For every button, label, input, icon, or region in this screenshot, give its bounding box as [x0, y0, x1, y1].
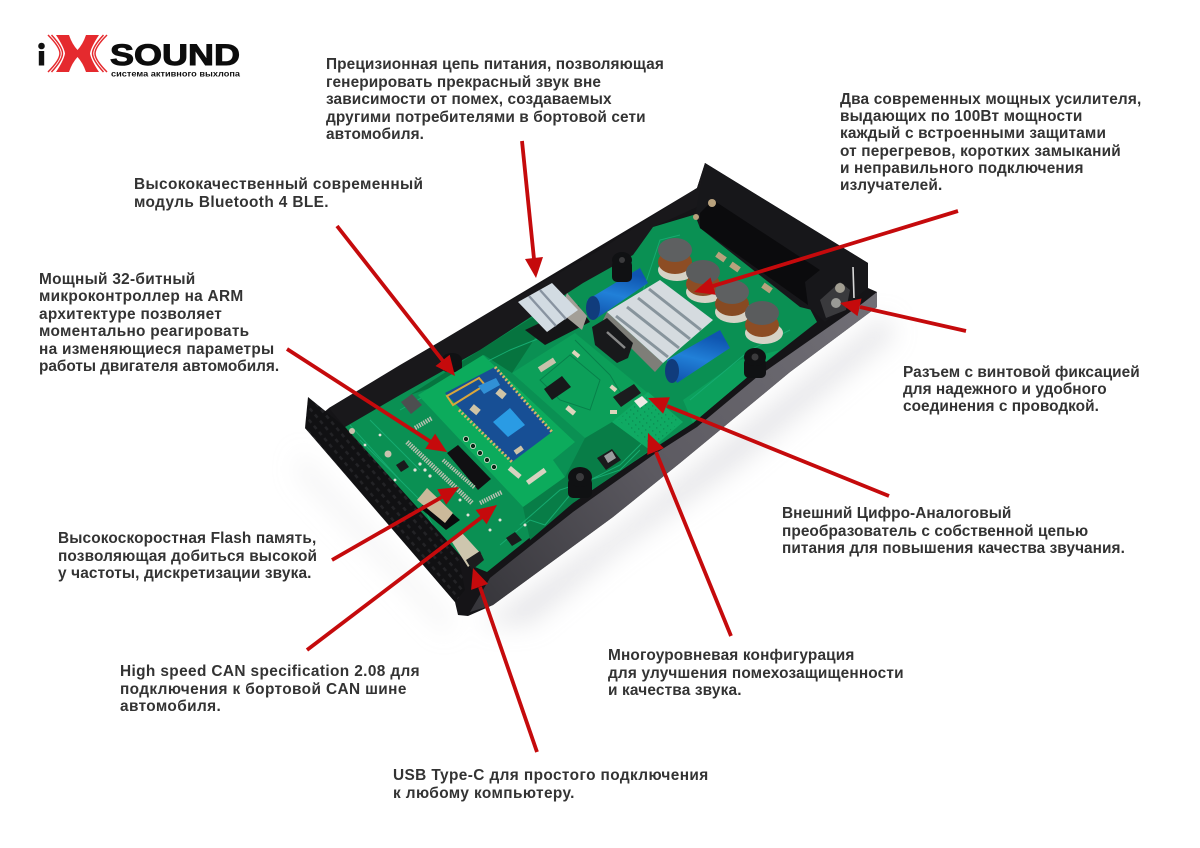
arrow: flash memory: [332, 487, 459, 560]
text: microcontroller: Мощный 32-битный: [39, 271, 196, 288]
text: microcontroller: моментально реагировать: [39, 323, 249, 340]
standoffs: [442, 252, 766, 498]
arrow: CAN: [307, 505, 497, 650]
text: amplifiers: каждый с встроенными защитами: [840, 125, 1106, 142]
text: amplifiers: выдающих по 100Вт мощности: [840, 108, 1083, 125]
text: power supply: Прецизионная цепь питания, позволяющая: [326, 56, 664, 73]
text: CAN: подключения к бортовой CAN шине: [120, 681, 407, 698]
case front wall: [470, 292, 877, 612]
text: amplifiers: Два современных мощных усилителя,: [840, 91, 1141, 108]
logo letter i: [38, 43, 45, 66]
microcontroller chip: [407, 442, 491, 503]
arrows: [287, 141, 966, 752]
text: flash: [58, 530, 317, 582]
text: Bluetooth: Высококачественный современный: [134, 176, 423, 193]
right end: black terminal block: [695, 163, 868, 322]
Bluetooth carrier board: [418, 355, 575, 507]
text: CAN: [120, 663, 420, 715]
darker board area: [410, 300, 650, 540]
electrolytic capacitor: black: [592, 318, 633, 363]
text: microcontroller: работы двигателя автомобиля.: [39, 358, 279, 375]
arrow: power supply: [522, 141, 543, 278]
text: terminal: соединения с проводкой.: [903, 398, 1099, 415]
coils: [658, 238, 783, 344]
text: power supply: генерировать прекрасный звук вне: [326, 74, 601, 91]
text: USB: [393, 767, 709, 802]
text: CAN: High speed CAN specification 2.08 для: [120, 663, 420, 680]
text: amplifiers: и неправильного подключения: [840, 160, 1084, 177]
light board area with vias: [683, 350, 780, 423]
text: microcontroller: микроконтроллер на ARM: [39, 288, 243, 305]
text: amplifiers: от перегревов, коротких замыканий: [840, 143, 1121, 160]
tan board parts near block: [693, 199, 773, 293]
strip on end wall: [853, 267, 854, 298]
text: amplifiers: [840, 91, 1141, 194]
screw terminal: [820, 282, 850, 318]
arrow: amplifiers: [694, 211, 958, 295]
arrow: microcontroller: [287, 349, 447, 452]
arrow: Bluetooth: [337, 226, 455, 376]
text: multilevel: и качества звука.: [608, 682, 742, 699]
small heatsink: [518, 283, 590, 345]
left end wall with grille: [305, 397, 465, 602]
large heatsink: [603, 280, 713, 372]
text: CAN: автомобиля.: [120, 698, 221, 715]
logo tagline: система активного выхлопа: [111, 70, 241, 78]
text: terminal: Разъем с винтовой фиксацией: [903, 364, 1140, 381]
text: power supply: другими потребителями в бортовой сети: [326, 109, 646, 126]
text: multilevel: для улучшения помехозащищенности: [608, 665, 904, 682]
arrow: multilevel PCB: [647, 433, 731, 636]
small board parts: [349, 394, 526, 546]
drop shadow: [295, 315, 895, 635]
logo mark: [48, 35, 107, 72]
electrolytic capacitor: blue bottom: [665, 330, 730, 383]
text: terminal: для надежного и удобного: [903, 381, 1107, 398]
Bluetooth module: [445, 367, 552, 462]
text: terminal: [903, 364, 1140, 415]
arrow: terminal: [840, 298, 966, 331]
text: USB: к любому компьютеру.: [393, 785, 575, 802]
text: power supply: зависимости от помех, создаваемых: [326, 91, 612, 108]
USB connector: [452, 533, 484, 570]
text: USB: USB Type-C для простого подключения: [393, 767, 709, 784]
text: flash: у частоты, дискретизации звука.: [58, 565, 312, 582]
text: DAC: питания для повышения качества звучания.: [782, 540, 1125, 557]
arrow: DAC: [648, 397, 889, 496]
text: power supply: [326, 56, 664, 143]
text: microcontroller: [39, 271, 279, 375]
text: amplifiers: излучателей.: [840, 177, 942, 194]
block surface: [700, 200, 820, 305]
text: microcontroller: архитектуре позволяет: [39, 306, 222, 323]
text: DAC: [782, 505, 1125, 557]
small chip beside carrier: [597, 449, 621, 470]
rear wall: [329, 163, 712, 427]
logo: [38, 34, 241, 78]
text: multilevel: Многоуровневая конфигурация: [608, 647, 855, 664]
text: flash: позволяющая добиться высокой: [58, 548, 317, 565]
board traces: [350, 235, 790, 545]
arrow: USB: [471, 568, 537, 752]
electrolytic capacitor: blue top: [586, 268, 648, 320]
text: Bluetooth: модуль Bluetooth 4 BLE.: [134, 194, 329, 211]
text: multilevel: [608, 647, 904, 699]
case base: [305, 163, 877, 616]
text: DAC: Внешний Цифро-Аналоговый: [782, 505, 1011, 522]
text: Bluetooth: [134, 176, 423, 211]
text: power supply: автомобиля.: [326, 126, 424, 143]
text: flash: Высокоскоростная Flash память,: [58, 530, 316, 547]
logo wordmark: SOUND: [110, 39, 240, 72]
text: DAC: преобразователь с собственной цепью: [782, 523, 1088, 540]
circuit board: [345, 213, 817, 572]
text: microcontroller: на изменяющиеся параметры: [39, 341, 274, 358]
crystal: [417, 488, 460, 530]
DAC board: [512, 333, 683, 450]
